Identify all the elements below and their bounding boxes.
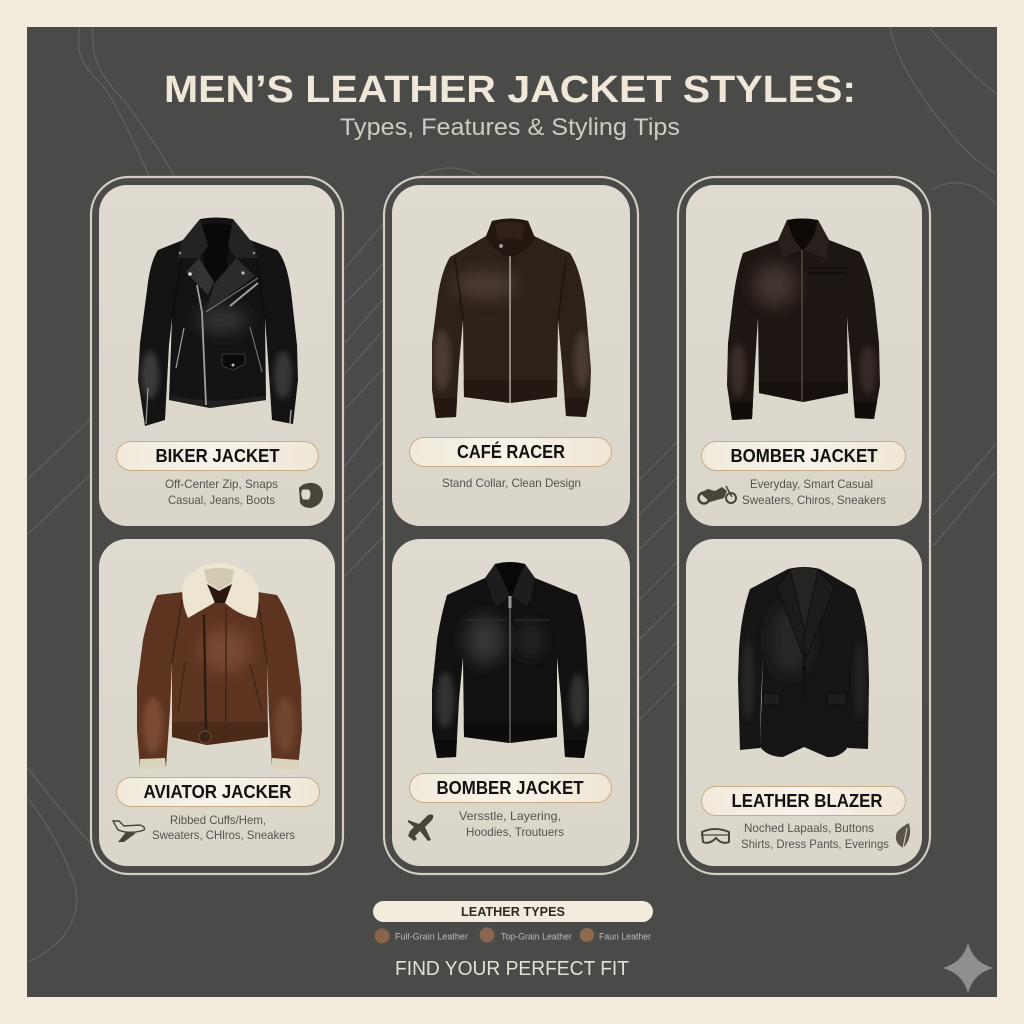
fur collar [182, 563, 259, 618]
label: middle bomber jacket [410, 774, 612, 802]
label: aviator jacket: AVIATOR JACKER [144, 782, 292, 802]
icon: leaf [896, 823, 910, 848]
fur cuffs [140, 758, 166, 769]
legend item: top-grain [480, 928, 572, 942]
legend item: top-grain: Top-Grain Leather [501, 932, 572, 942]
icon: motorcycle [698, 486, 736, 504]
label: top right bomber jacket [702, 442, 906, 470]
label: biker jacket: BIKER JACKET [156, 446, 280, 466]
column frame: right [678, 177, 930, 874]
features: aviator jacket: Ribbed Cuffs/Hem, [170, 813, 266, 827]
features: aviator jacket: Sweaters, CHlros, Sneakers [152, 828, 295, 842]
icon: aviator plane [113, 821, 144, 842]
panel: middle bomber jacket [392, 539, 630, 866]
label: cafe racer [410, 438, 612, 466]
features: middle bomber jacket: Versstle, Layering, [459, 809, 561, 823]
label: top right bomber jacket: BOMBER JACKET [730, 446, 878, 466]
legend item: faux: Faun Leather [599, 932, 651, 942]
legend item: full-grain [374, 928, 468, 944]
footer tagline: FIND YOUR PERFECT FIT [395, 958, 629, 980]
legend heading: LEATHER TYPES [461, 905, 565, 919]
icon: helmet [299, 483, 323, 508]
label: leather blazer: LEATHER BLAZER [732, 791, 882, 811]
jacket: blazer [738, 567, 869, 757]
jacket: biker [138, 218, 298, 426]
features: leather blazer: Noched Lapaals, Buttons [744, 821, 874, 835]
legend: leather types [373, 901, 653, 944]
features: top right bomber jacket: Everyday, Smart Casual [750, 477, 873, 491]
jacket: cafe racer [430, 218, 591, 422]
legend heading [373, 901, 653, 922]
title: MEN’S LEATHER JACKET STYLES: [164, 69, 856, 111]
label: aviator jacket [116, 778, 320, 806]
legend item: faux [580, 928, 651, 942]
jacket: black bomber [430, 562, 590, 760]
features: middle bomber jacket [459, 809, 564, 839]
icon: goggles [701, 829, 730, 843]
jacket: aviator [137, 563, 302, 770]
features: top right bomber jacket: Sweaters, Chiros, Sneakers [742, 493, 886, 507]
column frame: middle [384, 177, 638, 874]
icon: airplane [408, 814, 433, 841]
features: aviator jacket [152, 813, 295, 842]
label: middle bomber jacket: BOMBER JACKET [436, 778, 584, 798]
panel: aviator jacket [99, 539, 335, 866]
features: cafe racer: Stand Collar, Clean Design [442, 476, 581, 490]
panel: cafe racer [392, 185, 630, 526]
features: biker jacket [165, 477, 278, 507]
panel: top right bomber jacket [686, 185, 922, 526]
column frame: left [91, 177, 343, 874]
panel: leather blazer [686, 539, 922, 866]
legend item: full-grain: Full-Grain Leather [395, 932, 468, 942]
features: biker jacket: Off-Center Zip, Snaps [165, 477, 278, 491]
subtitle: Types, Features & Styling Tips [340, 114, 680, 141]
label: leather blazer [702, 786, 906, 816]
features: leather blazer [741, 821, 889, 851]
features: biker jacket: Casual, Jeans, Boots [168, 493, 275, 507]
features: top right bomber jacket [742, 477, 886, 507]
label: cafe racer: CAFÉ RACER [457, 441, 565, 462]
jacket: dark brown bomber [727, 218, 882, 422]
icon: sparkle [943, 943, 993, 993]
features: leather blazer: Shirts, Dress Pants, Everings [741, 837, 889, 851]
features: middle bomber jacket: Hoodies, Troutuers [466, 825, 564, 839]
panel: biker jacket [99, 185, 335, 526]
label: biker jacket [116, 442, 318, 470]
